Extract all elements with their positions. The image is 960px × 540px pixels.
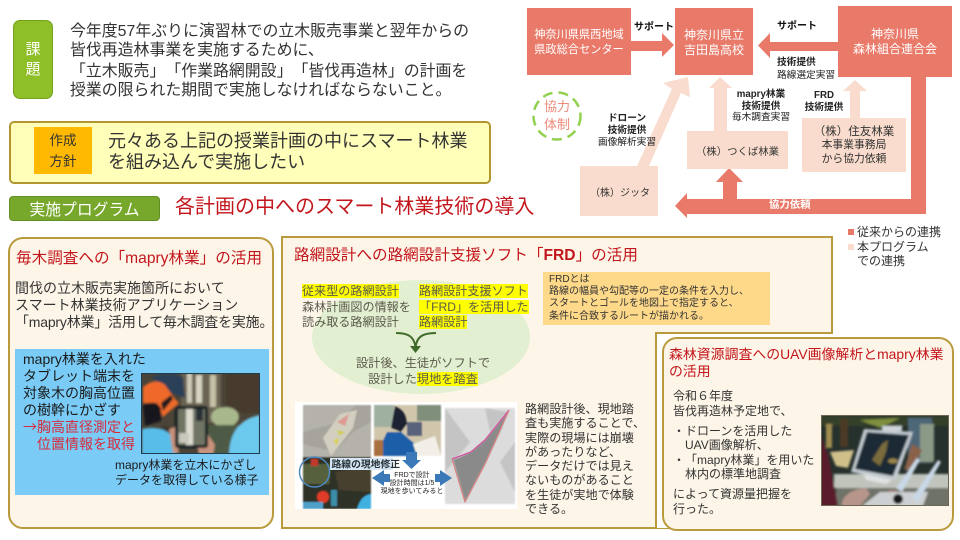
panel: policy <box>9 121 491 184</box>
box: 住友林業: （株）住友林業 <box>814 126 894 138</box>
box: 吉田島高校: 神奈川県立 <box>684 28 744 42</box>
box: つくば林業: （株）つくば林業 <box>696 146 779 158</box>
badge: 協力体制 <box>532 91 582 141</box>
white cutout behind UAV panel <box>655 332 833 528</box>
label: 路線選定実習: 技術提供 <box>777 57 816 68</box>
badge: 課題: 題 <box>25 60 40 78</box>
label: ドローン 技術提供: 技術提供 <box>608 125 646 136</box>
figure: design and site photos: 設計時間は1/5 <box>390 478 434 487</box>
text: site survey after design: 設計した現地を踏査 <box>368 372 478 386</box>
caption: tablet photo <box>115 458 259 487</box>
text: tablet instructions: の樹幹にかざす <box>23 402 121 418</box>
caption: tablet photo: mapry林業を立木にかざし <box>115 458 256 472</box>
panel: FRD road design <box>281 236 833 529</box>
label: サポート right: サポート <box>777 21 817 32</box>
text: site survey explanation: があったりなど、 <box>525 445 621 459</box>
text: policy statement: 元々ある上記の授業計画の中にスマート林業 <box>108 131 467 151</box>
heading: mapry panel title: 毎木調査への「mapry林業」の活用 <box>16 250 262 267</box>
text block: issue statement: 授業の限られた期間で実施しなければならないこと。 <box>70 82 451 99</box>
figure: design and site photos <box>295 402 517 509</box>
arrow: merge arrow <box>396 332 436 353</box>
text: mapry panel body <box>15 280 273 330</box>
heading: program title: 各計画の中へのスマート林業技術の導入 <box>175 196 534 218</box>
panel: blue example box <box>15 349 269 495</box>
callout: what is FRD: スタートとゴールを地図上で指定すると、 <box>549 298 739 309</box>
text: tablet instructions: mapry林業を入れた <box>23 351 146 367</box>
label: 協力依頼: 協力依頼 <box>769 200 811 211</box>
text: tablet instructions <box>23 351 146 452</box>
text: FRD design <box>419 284 529 329</box>
panel: mapry survey <box>8 237 274 529</box>
label: mapry林業 技術提供: mapry林業 <box>737 89 785 100</box>
badge: 課題: 課 <box>25 40 40 58</box>
box: 吉田島高校 <box>675 8 753 75</box>
text: policy statement <box>108 131 467 172</box>
label: mapry林業 技術提供: 技術提供 <box>742 101 780 112</box>
legend: での連携 <box>857 254 905 268</box>
box: 森林組合連合会: 神奈川県 <box>871 26 919 40</box>
box: つくば林業 <box>687 131 788 169</box>
heading: UAV panel title: の活用 <box>669 363 711 379</box>
label: mapry林業 技術提供 <box>732 88 790 123</box>
photo: drone controller <box>821 415 949 506</box>
label: FRD 技術提供: 技術提供 <box>805 102 843 113</box>
badge: 実施プログラム: 実施プログラム <box>29 202 140 219</box>
label: FRD 技術提供 <box>804 90 843 113</box>
legend <box>848 225 941 268</box>
box: 住友林業 <box>802 118 906 172</box>
badge: 協力体制: 協力 <box>544 99 570 114</box>
label: 作成方針: 方針 <box>50 154 76 169</box>
label: ドローン 技術提供 <box>598 113 656 148</box>
text: conventional design: 従来型の路網設計 <box>302 284 399 298</box>
text: tablet instructions: 位置情報を取得 <box>37 436 135 452</box>
diagram: cooperation structure <box>527 6 952 268</box>
label: 路線選定実習: 路線選定実習 <box>777 70 835 80</box>
text: site survey explanation: 実際の現場には崩壊 <box>525 431 634 445</box>
text: UAV panel body <box>673 389 814 516</box>
text: UAV panel body: によって資源量把握を <box>673 487 792 501</box>
text: conventional design: 森林計画図の情報を <box>302 300 411 314</box>
figure: design and site photos: 現地を歩いてみると <box>381 486 443 495</box>
label: FRD 技術提供: FRD <box>814 90 834 101</box>
box: ジッタ <box>580 166 658 216</box>
badge: 課題 <box>13 20 53 99</box>
text: tablet instructions: 対象木の胸高位置 <box>23 385 135 401</box>
heading: UAV panel title <box>669 346 943 379</box>
text: UAV panel body: 皆伐再造林予定地で、 <box>673 404 793 418</box>
text: mapry panel body: 「mapry林業」活用して毎木調査を実施。 <box>15 314 273 330</box>
text: site survey explanation: データだけでは見え <box>525 459 634 473</box>
text: conventional design: 読み取る路網設計 <box>302 315 399 329</box>
photo: tablet on tree <box>141 373 260 454</box>
label: 作成方針 <box>34 127 92 174</box>
text block: issue statement: 「立木販売」「作業路網開設」「皆伐再造林」の計画を <box>70 63 467 80</box>
text: site survey after design <box>356 356 490 386</box>
text: UAV panel body: UAV画像解析、 <box>685 438 769 452</box>
text: site survey after design: 設計後、生徒がソフトで <box>356 356 490 370</box>
text: site survey explanation <box>525 402 645 516</box>
text: site survey explanation: を生徒が実地で体験 <box>525 488 634 502</box>
text: FRD design: 「FRD」を活用した <box>419 300 529 314</box>
text: FRD design: 路網設計 <box>419 315 467 329</box>
text: FRD design: 路網設計支援ソフト <box>419 284 528 298</box>
callout: what is FRD: 路線の幅員や勾配等の一定の条件を入力し、 <box>549 286 749 297</box>
label: サポート left: サポート <box>634 22 674 33</box>
text: mapry panel body: 間伐の立木販売実施箇所において <box>15 280 225 296</box>
chart: road design comparison ellipse <box>312 280 530 394</box>
badge: 実施プログラム <box>9 196 160 221</box>
text: policy statement: を組み込んで実施したい <box>108 152 305 172</box>
panel: UAV survey <box>662 337 954 531</box>
legend: 従来からの連携 <box>857 225 941 239</box>
text: tablet instructions: タブレット端末を <box>23 368 135 384</box>
text: UAV panel body: 行った。 <box>673 502 721 516</box>
box: 森林組合連合会 <box>838 6 952 77</box>
box: 県西地域県政総合センター <box>527 8 631 75</box>
text: site survey explanation: 路網設計後、現地踏 <box>525 402 634 416</box>
text: UAV panel body: 林内の標準地調査 <box>685 467 781 481</box>
label: ドローン 技術提供: ドローン <box>608 113 646 124</box>
heading: FRD panel title: 路網設計への路網設計支援ソフト「FRD」の活用 <box>294 247 638 264</box>
heading: UAV panel title: 森林資源調査へのUAV画像解析とmapry林業 <box>669 346 943 362</box>
box: 住友林業: から協力依頼 <box>822 153 886 165</box>
callout: what is FRD: FRDとは <box>549 274 590 284</box>
figure: design and site photos: FRDで設計 <box>394 470 430 479</box>
badge: 協力体制: 体制 <box>544 117 570 132</box>
label: mapry林業 技術提供: 毎木調査実習 <box>732 112 790 123</box>
text block: issue statement: 今年度57年ぶりに演習林での立木販売事業と翌年からの <box>70 23 469 40</box>
box: ジッタ: （株）ジッタ <box>590 188 650 198</box>
box: 県西地域県政総合センター: 神奈川県県西地域 <box>534 29 624 41</box>
label: ドローン 技術提供: 画像解析実習 <box>598 137 656 148</box>
caption: tablet photo: データを取得している様子 <box>115 473 259 487</box>
box: 森林組合連合会: 森林組合連合会 <box>853 42 937 56</box>
text: UAV panel body: 令和６年度 <box>673 389 733 403</box>
text: UAV panel body: ・ドローンを活用した <box>673 424 792 438</box>
label: 路線選定実習 <box>777 56 835 80</box>
text: conventional design <box>302 284 411 329</box>
label: 作成方針: 作成 <box>50 133 76 148</box>
callout: what is FRD <box>543 272 770 325</box>
text block: issue statement: 皆伐再造林事業を実施するために、 <box>70 42 324 59</box>
box: 住友林業: 本事業事務局 <box>822 139 886 151</box>
text: mapry panel body: スマート林業技術アプリケーション <box>15 297 238 313</box>
legend: 本プログラム <box>857 240 929 254</box>
text: site survey explanation: できる。 <box>525 502 573 516</box>
text block: issue statement <box>70 22 469 99</box>
box: 吉田島高校: 吉田島高校 <box>684 43 744 57</box>
callout: what is FRD: 条件に合致するルートが描かれる。 <box>549 311 709 322</box>
box: 県西地域県政総合センター: 県政総合センター <box>534 44 624 56</box>
figure: design and site photos: 路線の現地修正 <box>332 458 400 470</box>
text: site survey explanation: ないものがあること <box>525 473 634 487</box>
text: UAV panel body: ・「mapry林業」を用いた <box>673 453 814 467</box>
text: site survey explanation: 査も実施することで、 <box>525 416 645 430</box>
text: tablet instructions: →胸高直径測定と <box>23 417 135 437</box>
